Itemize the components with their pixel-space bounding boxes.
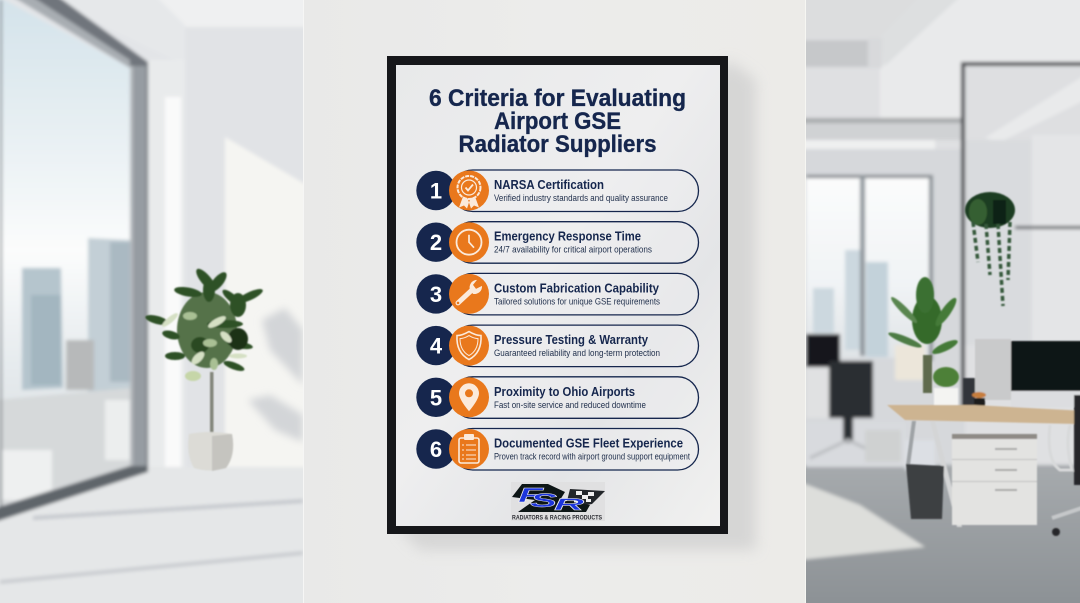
- logo: FSR Radiators & Racing Products: RADIATORS & RACING PRODUCTS: [512, 514, 603, 522]
- icon: shield: [449, 326, 489, 366]
- poster frame: [387, 56, 728, 534]
- criterion 1: NARSA Certification: Verified industry standards and quality assurance: [494, 193, 668, 203]
- desk setup: [887, 339, 1080, 536]
- icon: hanging plant: [965, 192, 1015, 306]
- towers: [0, 238, 130, 506]
- criterion 2: Emergency Response Time: [416, 222, 698, 263]
- icon: wrench: [449, 274, 489, 314]
- criterion 5: Proximity to Ohio Airports: 5: [430, 385, 442, 410]
- criterion 4: Pressure Testing & Warranty: Pressure Testing & Warranty: [494, 332, 649, 347]
- checkered flag: [565, 489, 605, 509]
- criterion 3: Custom Fabrication Capability: Custom Fabrication Capability: [494, 280, 660, 295]
- icon: desk plant: [933, 367, 959, 414]
- poster shadow: [400, 60, 756, 550]
- title: 6 Criteria for Evaluating: [429, 85, 686, 112]
- criterion 1: NARSA Certification: NARSA Certification: [494, 177, 604, 192]
- criterion 2: Emergency Response Time: 2: [430, 230, 442, 255]
- criterion 6: Documented GSE Fleet Experience: Proven track record with airport ground support equipment: [494, 452, 690, 462]
- icon: floor plant: [887, 277, 959, 393]
- criterion 3: Custom Fabrication Capability: [416, 273, 698, 315]
- criterion 4: Pressure Testing & Warranty: 4: [430, 334, 443, 359]
- criterion 6: Documented GSE Fleet Experience: Documented GSE Fleet Experience: [494, 436, 683, 450]
- logo: FSR Radiators & Racing Products: F: [518, 485, 545, 507]
- criterion 1: NARSA Certification: [416, 170, 698, 212]
- criterion 2: Emergency Response Time: Emergency Response Time: [494, 229, 641, 244]
- panel: right open-plan office: [800, 0, 1080, 603]
- logo: FSR Radiators & Racing Products: S: [530, 491, 558, 512]
- criterion 6: Documented GSE Fleet Experience: 6: [430, 437, 442, 462]
- criterion 2: Emergency Response Time: 24/7 availability for critical airport operations: [494, 245, 652, 255]
- criterion 4: Pressure Testing & Warranty: Guaranteed reliability and long-term protection: [494, 348, 660, 358]
- far skyline: [813, 250, 888, 357]
- criterion 3: Custom Fabrication Capability: Tailored solutions for unique GSE requirements: [494, 296, 660, 306]
- icon: location pin: [449, 377, 489, 417]
- panel: central white wall: [303, 0, 806, 603]
- logo: FSR Radiators & Racing Products: R: [554, 495, 586, 514]
- criterion 4: Pressure Testing & Warranty: [416, 325, 698, 367]
- logo: FSR Radiators & Racing Products: [511, 482, 605, 522]
- criterion 1: NARSA Certification: 1: [430, 178, 442, 204]
- criterion 5: Proximity to Ohio Airports: Proximity to Ohio Airports: [494, 384, 635, 399]
- icon: potted plant: [144, 266, 264, 471]
- title: [429, 85, 686, 158]
- criterion 6: Documented GSE Fleet Experience: [416, 428, 698, 470]
- plant shadow on wall: [248, 308, 303, 442]
- title: Radiator Suppliers: [458, 131, 656, 158]
- icon: rosette award badge: [449, 170, 489, 210]
- title: Airport GSE: [494, 108, 621, 135]
- icon: clock: [449, 222, 489, 262]
- criterion 5: Proximity to Ohio Airports: [416, 377, 698, 418]
- icon: clipboard: [449, 429, 489, 469]
- criterion 3: Custom Fabrication Capability: 3: [430, 282, 442, 307]
- criterion 5: Proximity to Ohio Airports: Fast on-site service and reduced downtime: [494, 400, 646, 410]
- icon: waste bin: [906, 464, 944, 519]
- panel: left office with window: [0, 0, 313, 603]
